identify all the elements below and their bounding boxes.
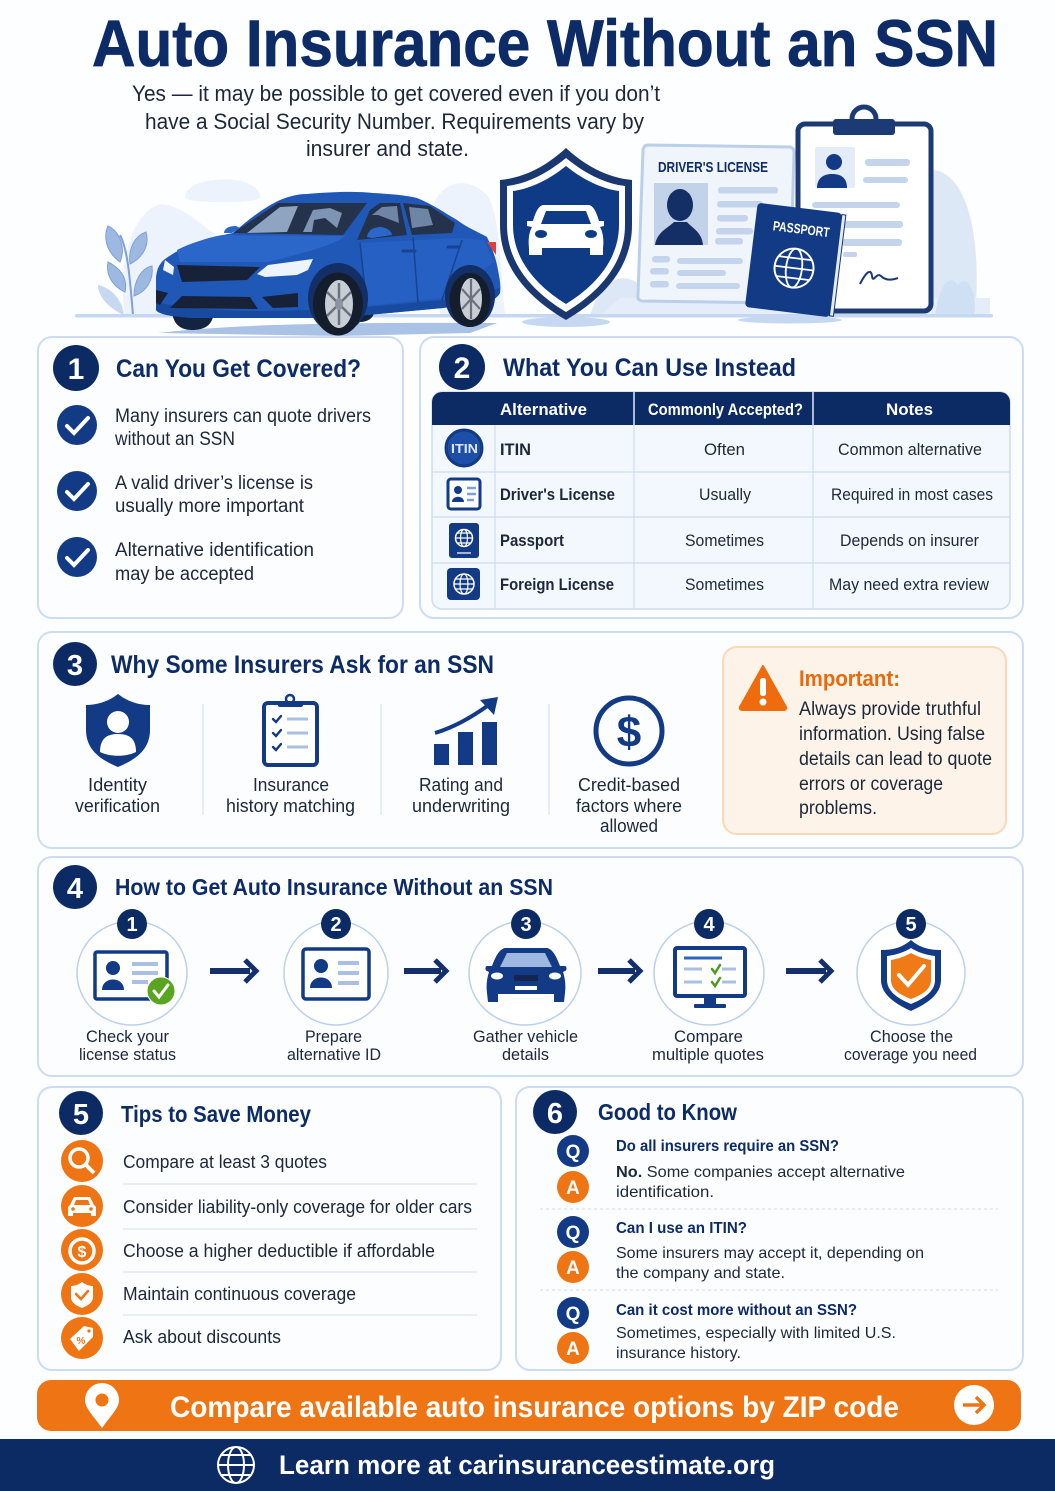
step 3: Gather vehicle bbox=[473, 1028, 578, 1046]
headlights bbox=[163, 260, 174, 275]
row: passport: Sometimes bbox=[685, 532, 764, 550]
callout: important: errors or coverage bbox=[799, 774, 943, 795]
row: passport: Depends on insurer bbox=[840, 532, 979, 550]
icon: passport bbox=[449, 523, 479, 558]
item 2: A valid driver’s license is bbox=[115, 473, 313, 494]
body bbox=[156, 192, 500, 318]
call-to-action banner bbox=[37, 1380, 1021, 1431]
FAQ 1: Q bbox=[566, 1142, 580, 1163]
step 1: 1 bbox=[126, 914, 138, 936]
badge 3: 3 bbox=[67, 650, 83, 682]
icon: license bbox=[448, 479, 480, 509]
panel: what you can use instead bbox=[420, 337, 1023, 618]
car bbox=[156, 192, 500, 336]
FAQ 3: Q bbox=[566, 1304, 580, 1325]
item 3: Alternative identification bbox=[115, 540, 314, 561]
front side window bbox=[357, 203, 407, 240]
FAQ 3 bbox=[557, 1297, 896, 1364]
FAQ 3: A bbox=[566, 1339, 580, 1360]
subtitle bbox=[132, 81, 660, 161]
tip 3: Choose a higher deductible if affordable bbox=[123, 1241, 435, 1261]
icon: location pin bbox=[85, 1383, 119, 1428]
driver's license card: DRIVER'S LICENSE bbox=[658, 159, 768, 176]
reason: credit-based factors: factors where bbox=[576, 796, 682, 816]
far wheels bbox=[172, 313, 214, 330]
FAQ 2 bbox=[557, 1216, 924, 1283]
passport: PASSPORT bbox=[772, 218, 831, 240]
row: foreign license: Sometimes bbox=[685, 576, 764, 594]
row: driver's license: Usually bbox=[699, 486, 752, 504]
icon: ITIN: ITIN bbox=[451, 441, 478, 456]
rear side window bbox=[403, 203, 455, 235]
badge 4 bbox=[53, 865, 97, 909]
item 3 bbox=[57, 537, 314, 585]
tip 3 bbox=[61, 1229, 435, 1271]
step 4: Compare bbox=[674, 1028, 743, 1046]
step 2: Prepare bbox=[305, 1028, 362, 1046]
step 5: Choose the bbox=[870, 1028, 953, 1046]
heading: What You Can Use Instead bbox=[503, 354, 796, 382]
item 1 bbox=[57, 405, 371, 450]
arrow bbox=[598, 960, 640, 982]
row: foreign license bbox=[500, 576, 989, 594]
driver's license card bbox=[638, 145, 794, 303]
hood highlight bbox=[177, 235, 345, 262]
tip 5: % bbox=[77, 1336, 86, 1347]
tip 1 bbox=[61, 1140, 327, 1182]
item 1: Many insurers can quote drivers bbox=[115, 406, 371, 427]
step 2 bbox=[284, 909, 388, 1064]
badge 2: 2 bbox=[454, 352, 470, 385]
callout: important: Important: bbox=[799, 666, 900, 691]
subtitle: Yes — it may be possible to get covered even if you don’t bbox=[132, 81, 660, 106]
row: foreign license: May need extra review bbox=[829, 576, 989, 594]
icon: foreign license bbox=[447, 568, 480, 600]
badge 5: 5 bbox=[73, 1099, 89, 1131]
row: ITIN bbox=[500, 441, 982, 459]
step 1: Check your bbox=[86, 1028, 170, 1046]
FAQ 3: Sometimes, especially with limited U.S. bbox=[616, 1325, 896, 1342]
side lighter panel bbox=[360, 238, 494, 306]
door lines and handles bbox=[360, 237, 462, 307]
footer bar bbox=[0, 1439, 1055, 1491]
reason: identity verification: verification bbox=[75, 796, 160, 816]
ground line bbox=[75, 314, 993, 318]
panel: why insurers ask bbox=[38, 632, 1023, 848]
reason: rating and underwriting: underwriting bbox=[412, 796, 510, 816]
FAQ 3: insurance history. bbox=[616, 1345, 741, 1362]
FAQ 2: the company and state. bbox=[616, 1265, 785, 1282]
FAQ 2: Q bbox=[566, 1223, 580, 1244]
shield with car bbox=[500, 148, 632, 320]
arrow bbox=[210, 960, 256, 982]
reason: rating and underwriting bbox=[412, 697, 510, 816]
reason: rating and underwriting: Rating and bbox=[419, 775, 503, 795]
tip 3: $ bbox=[78, 1244, 87, 1261]
reason: credit-based factors: Credit-based bbox=[578, 775, 680, 795]
mirrors bbox=[367, 227, 392, 238]
taillight bbox=[487, 242, 496, 255]
tip 4 bbox=[61, 1273, 356, 1315]
tip 1: Compare at least 3 quotes bbox=[123, 1152, 327, 1172]
tip 2: Consider liability-only coverage for older cars bbox=[123, 1197, 472, 1217]
row: foreign license: Foreign License bbox=[500, 576, 614, 594]
lower trim bbox=[156, 288, 500, 318]
FAQ 3: Can it cost more without an SSN? bbox=[616, 1302, 857, 1319]
step 3: details bbox=[502, 1046, 549, 1064]
callout: important bbox=[723, 647, 1006, 834]
reason: insurance history: Insurance bbox=[253, 775, 329, 795]
panel: good to know bbox=[516, 1087, 1023, 1370]
reason: insurance history bbox=[226, 695, 355, 816]
item 2: usually more important bbox=[115, 496, 305, 517]
badge 6: 6 bbox=[547, 1098, 563, 1130]
panel: how to get insurance bbox=[38, 857, 1023, 1076]
row: passport bbox=[500, 532, 979, 550]
step 2: 2 bbox=[330, 914, 342, 936]
windshield bbox=[233, 203, 367, 235]
heading: Why Some Insurers Ask for an SSN bbox=[111, 651, 494, 679]
step 5: 5 bbox=[905, 914, 917, 936]
step 2: alternative ID bbox=[287, 1046, 381, 1064]
FAQ 1: A bbox=[566, 1178, 580, 1199]
FAQ 1: No. Some companies accept alternative bbox=[616, 1164, 905, 1181]
grille bbox=[177, 265, 260, 282]
reason: insurance history: history matching bbox=[226, 796, 355, 816]
row: driver's license bbox=[500, 486, 993, 504]
item 1: without an SSN bbox=[114, 429, 235, 450]
arrow bbox=[786, 960, 831, 982]
badge 1: 1 bbox=[68, 353, 84, 386]
FAQ 1: identification. bbox=[616, 1184, 714, 1201]
heading: Can You Get Covered? bbox=[116, 355, 361, 383]
row: driver's license: Required in most cases bbox=[831, 486, 993, 504]
step 3: 3 bbox=[520, 914, 532, 936]
hero illustration bbox=[75, 107, 993, 336]
table header bbox=[500, 400, 933, 419]
step 4 bbox=[652, 909, 764, 1064]
rear wheel bbox=[445, 265, 495, 327]
subtitle: insurer and state. bbox=[306, 136, 469, 161]
row: passport: Passport bbox=[500, 532, 564, 550]
FAQ 2: Some insurers may accept it, depending on bbox=[616, 1245, 924, 1262]
FAQ 2: Can I use an ITIN? bbox=[616, 1220, 747, 1237]
reason: credit-based factors: $ bbox=[617, 708, 641, 757]
tip 5 bbox=[61, 1317, 281, 1359]
panel: can you get covered bbox=[38, 337, 403, 618]
badge 6 bbox=[533, 1090, 577, 1134]
call-to-action banner: Compare available auto insurance options by ZIP code bbox=[170, 1391, 899, 1424]
reason: identity verification: Identity bbox=[88, 775, 147, 795]
table header: Notes bbox=[886, 400, 933, 419]
badge 1 bbox=[53, 345, 99, 391]
icon: arrow button bbox=[954, 1385, 994, 1425]
plant bbox=[98, 226, 152, 315]
row: driver's license: Driver's License bbox=[500, 486, 615, 504]
reason: credit-based factors bbox=[576, 698, 682, 836]
step 4: multiple quotes bbox=[652, 1046, 764, 1064]
icon: globe bbox=[218, 1447, 254, 1483]
item 2 bbox=[57, 471, 313, 517]
badge 2 bbox=[439, 344, 485, 390]
heading: Good to Know bbox=[598, 1099, 737, 1125]
tip 2 bbox=[61, 1185, 472, 1227]
table bbox=[432, 392, 1010, 609]
heading: How to Get Auto Insurance Without an SSN bbox=[115, 874, 553, 900]
front wheel bbox=[308, 263, 368, 336]
table header: Alternative bbox=[500, 400, 587, 419]
step 5: coverage you need bbox=[844, 1046, 977, 1064]
background foliage blobs bbox=[123, 170, 990, 316]
step 1: license status bbox=[79, 1046, 176, 1064]
table header: Commonly Accepted? bbox=[648, 400, 803, 419]
callout: important: details can lead to quote bbox=[799, 749, 992, 770]
icon: ITIN bbox=[446, 430, 482, 466]
badge 3 bbox=[53, 642, 97, 686]
FAQ 1 bbox=[557, 1135, 905, 1203]
subtitle: have a Social Security Number. Requirements vary by bbox=[145, 109, 644, 134]
row: ITIN: ITIN bbox=[500, 441, 531, 459]
tip 4: Maintain continuous coverage bbox=[123, 1284, 356, 1304]
icon: warning bbox=[740, 666, 786, 710]
badge 5 bbox=[59, 1091, 103, 1135]
step 5 bbox=[844, 909, 977, 1064]
item 3: may be accepted bbox=[115, 564, 254, 585]
arrow bbox=[404, 960, 446, 982]
passport bbox=[745, 203, 846, 318]
FAQ 1: Do all insurers require an SSN? bbox=[616, 1138, 839, 1155]
callout: important: Always provide truthful bbox=[799, 699, 981, 720]
badge 4: 4 bbox=[67, 873, 83, 905]
row: ITIN: Often bbox=[704, 441, 745, 459]
FAQ 2: A bbox=[566, 1258, 580, 1279]
callout: important: problems. bbox=[799, 798, 877, 819]
callout: important: information. Using false bbox=[799, 724, 985, 745]
reason: credit-based factors: allowed bbox=[600, 816, 658, 836]
step 1 bbox=[77, 909, 187, 1064]
panel: tips to save money bbox=[38, 1087, 501, 1370]
reason: identity verification bbox=[75, 694, 160, 816]
tip 5: Ask about discounts bbox=[123, 1327, 281, 1347]
step 4: 4 bbox=[703, 914, 715, 936]
clipboard bbox=[798, 107, 931, 311]
heading: Tips to Save Money bbox=[121, 1101, 311, 1127]
step 3 bbox=[469, 909, 581, 1064]
row: ITIN: Common alternative bbox=[838, 441, 982, 459]
footer bar: Learn more at carinsuranceestimate.org bbox=[279, 1450, 775, 1480]
